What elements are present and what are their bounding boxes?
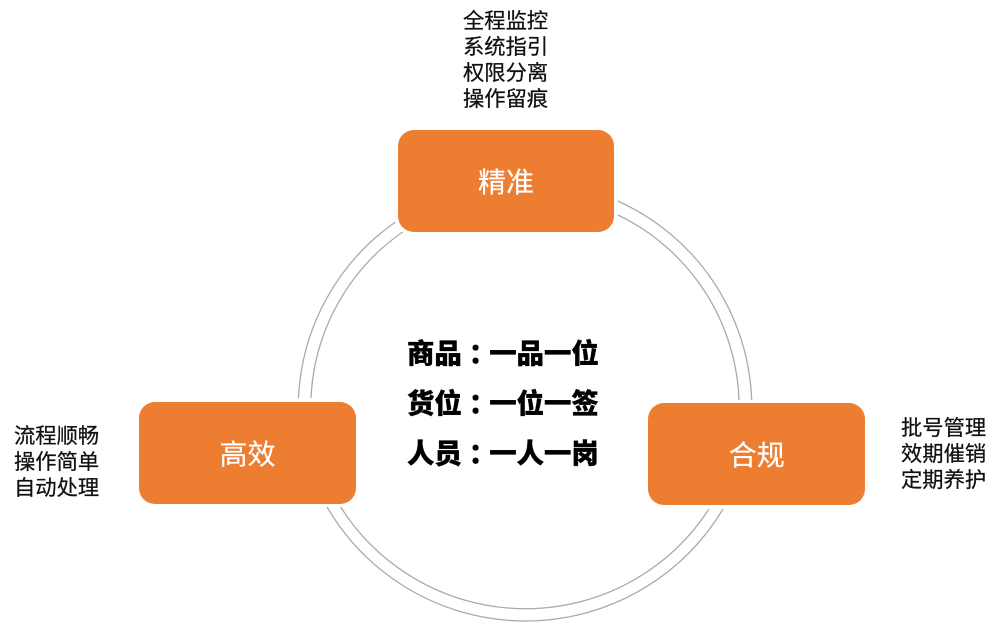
top list: 精准 details: 操作留痕: [463, 87, 548, 111]
center text block: 人员 ：一人一岗: [407, 438, 599, 469]
left list: 高效 details: [14, 424, 99, 500]
left list: 高效 details: 流程顺畅: [14, 424, 99, 448]
box: 精准: 精准: [478, 167, 534, 198]
left list: 高效 details: 自动处理: [14, 476, 99, 500]
center text block: [407, 338, 599, 469]
right list: 合规 details: [901, 416, 986, 492]
right list: 合规 details: 批号管理: [901, 416, 986, 440]
left list: 高效 details: 操作简单: [14, 450, 99, 474]
right list: 合规 details: 效期催销: [901, 442, 986, 466]
top list: 精准 details: [463, 9, 548, 111]
right list: 合规 details: 定期养护: [901, 468, 986, 492]
box: 高效: [139, 402, 356, 504]
top list: 精准 details: 系统指引: [463, 35, 548, 59]
center text block: 商品 ：一品一位: [407, 338, 599, 369]
box: 合规: [648, 403, 865, 505]
top list: 精准 details: 全程监控: [463, 9, 548, 33]
box: 精准: [398, 130, 614, 232]
center text block: 货位 ：一位一签: [407, 388, 599, 419]
top list: 精准 details: 权限分离: [463, 61, 548, 85]
box: 合规: 合规: [729, 440, 785, 471]
box: 高效: 高效: [219, 439, 276, 470]
